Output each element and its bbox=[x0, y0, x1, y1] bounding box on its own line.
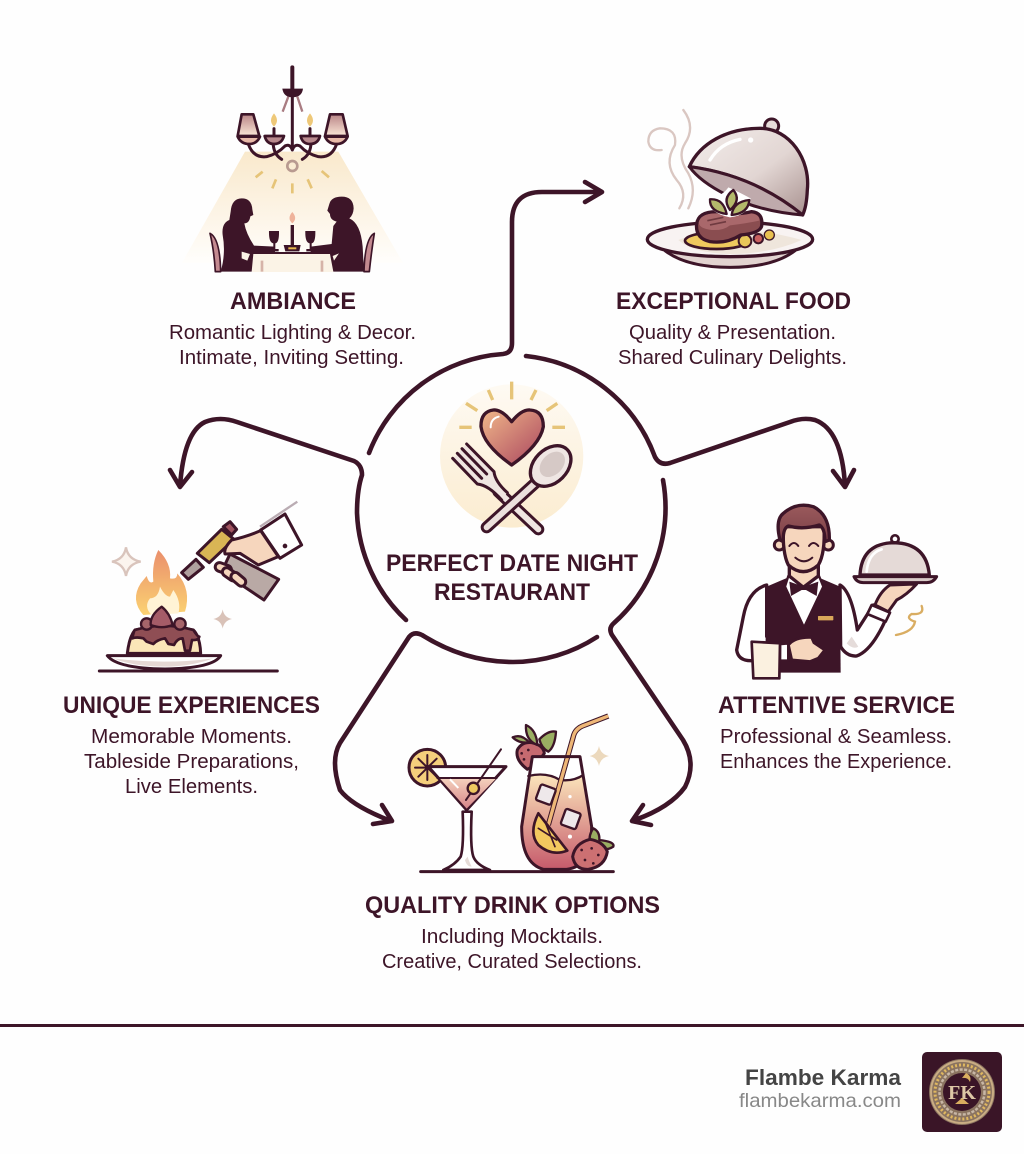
panel: attentive service bbox=[718, 505, 955, 773]
panel: center bbox=[386, 382, 638, 606]
panel: ambiance bbox=[169, 67, 416, 369]
brand url: flambekarma.com bbox=[739, 1090, 901, 1112]
panel: exceptional food bbox=[616, 110, 851, 369]
description: Shared Culinary Delights. bbox=[618, 347, 847, 369]
title: RESTAURANT bbox=[434, 579, 590, 606]
description: Quality & Presentation. bbox=[629, 322, 836, 344]
description bbox=[169, 322, 416, 369]
heading: QUALITY DRINK OPTIONS bbox=[365, 892, 660, 919]
arrow: to unique experiences bbox=[170, 419, 406, 620]
title bbox=[386, 550, 638, 606]
description: Tableside Preparations, bbox=[84, 751, 299, 773]
panel: quality drink options bbox=[365, 716, 660, 973]
arrow: to quality drinks from right bbox=[610, 480, 691, 825]
brand name: Flambe Karma bbox=[745, 1065, 902, 1090]
title: PERFECT DATE NIGHT bbox=[386, 550, 638, 577]
arrow: to exceptional food bbox=[369, 182, 602, 453]
arrow: to attentive service bbox=[526, 356, 854, 487]
description: Creative, Curated Selections. bbox=[382, 951, 642, 973]
description: Enhances the Experience. bbox=[720, 751, 952, 773]
logo: FK bbox=[948, 1082, 976, 1104]
description bbox=[382, 926, 642, 973]
icon: heart with crossed fork and spoon bbox=[440, 382, 583, 529]
heading: EXCEPTIONAL FOOD bbox=[616, 288, 851, 315]
description bbox=[84, 726, 299, 798]
description: Live Elements. bbox=[125, 776, 258, 798]
description: Memorable Moments. bbox=[91, 726, 292, 748]
heading: UNIQUE EXPERIENCES bbox=[63, 692, 320, 719]
description: Romantic Lighting & Decor. bbox=[169, 322, 416, 344]
logo bbox=[922, 1052, 1002, 1132]
description bbox=[720, 726, 952, 773]
description bbox=[618, 322, 847, 369]
icon: smiling waiter holding cloche bbox=[737, 505, 937, 678]
arrow: to quality drinks bbox=[335, 633, 597, 824]
description: Professional & Seamless. bbox=[720, 726, 952, 748]
icon: torch flambeing a dessert bbox=[99, 502, 302, 671]
footer brand bbox=[739, 1052, 1002, 1132]
icon: cocktail and fruit drink bbox=[409, 716, 613, 872]
center hub with connecting arrows bbox=[170, 182, 854, 825]
description: Including Mocktails. bbox=[421, 926, 603, 948]
panel: unique experiences bbox=[63, 502, 320, 798]
heading: AMBIANCE bbox=[230, 288, 356, 315]
icon: cloche over plated steak bbox=[647, 110, 813, 267]
icon: chandelier and couple dining bbox=[182, 67, 403, 272]
heading: ATTENTIVE SERVICE bbox=[718, 692, 955, 719]
description: Intimate, Inviting Setting. bbox=[179, 347, 404, 369]
